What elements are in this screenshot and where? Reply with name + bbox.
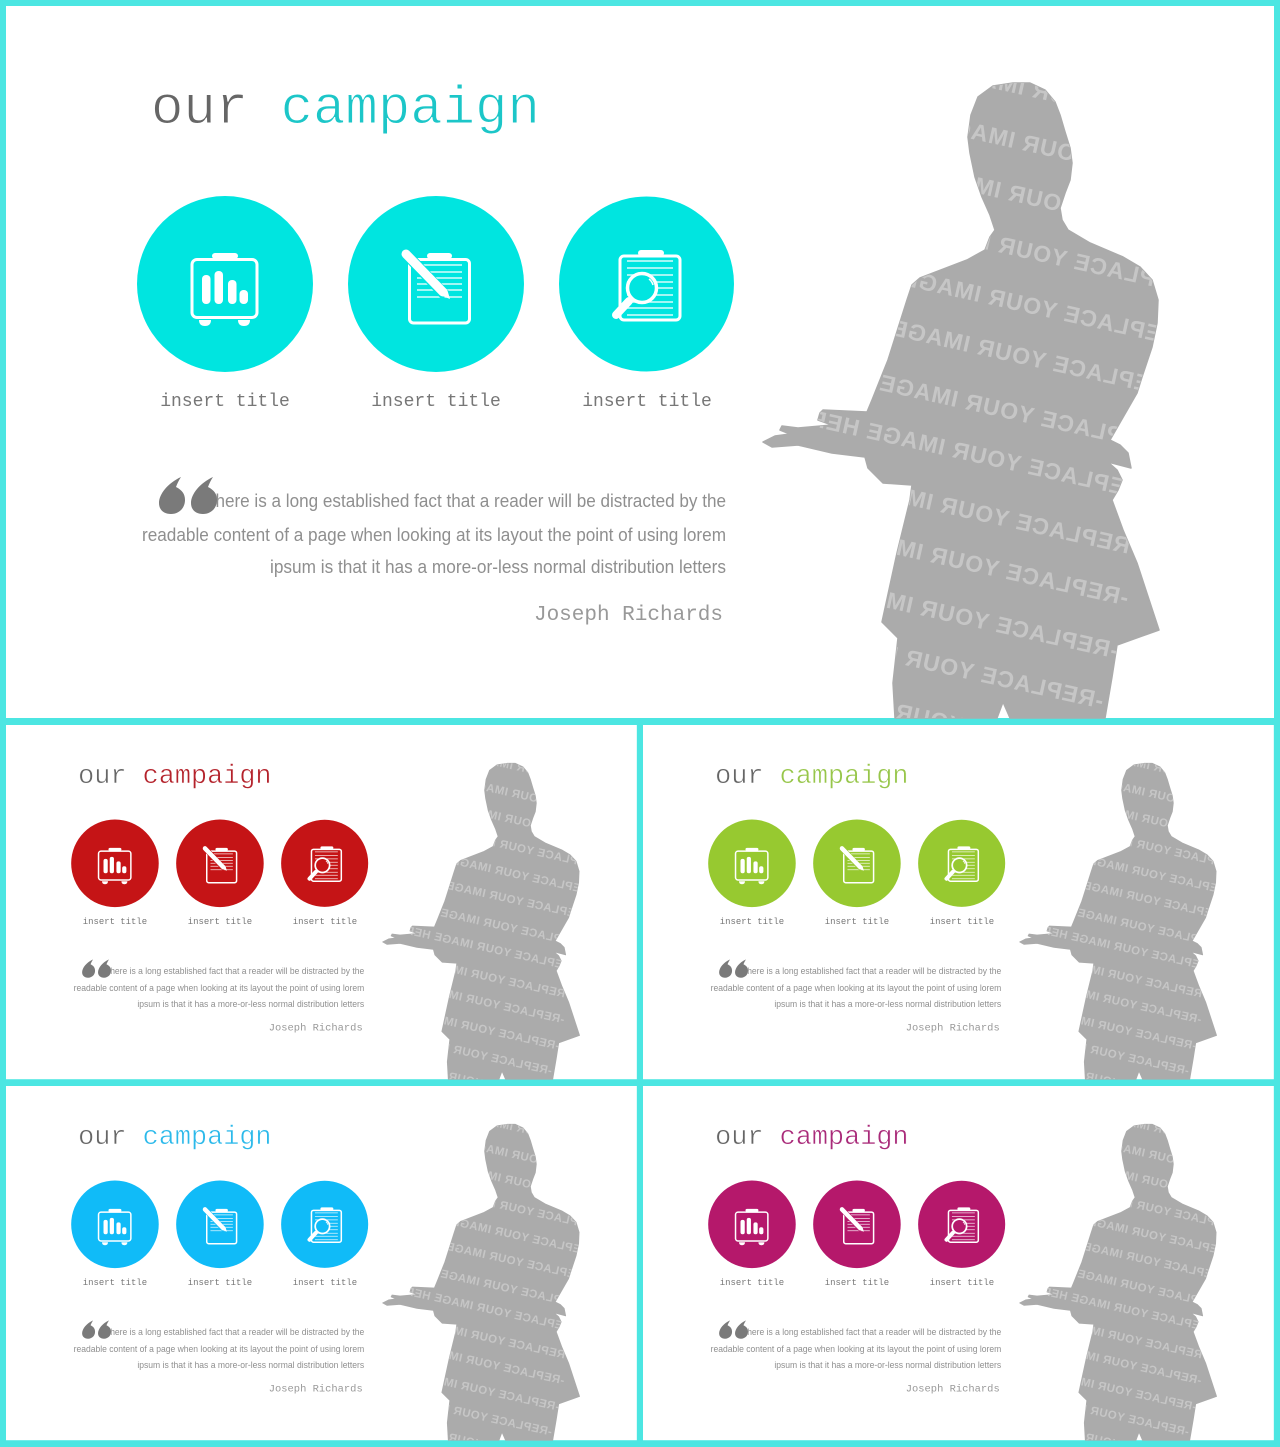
silhouette placeholder: -REPLACE YOUR IMAGE HERE: [373, 1026, 553, 1078]
silhouette placeholder: -REPLACE YOUR IMAGE HERE: [390, 1311, 570, 1362]
icon: quote marks: [719, 959, 748, 978]
silhouette placeholder: [1019, 1124, 1217, 1441]
quote text: There is a long established fact that a reader will be distracted by the: [742, 966, 1001, 976]
icon: presentation board: [137, 196, 313, 372]
silhouette placeholder: -REPLACE YOUR IMAGE HERE: [390, 950, 570, 1001]
label: insert title: [160, 392, 290, 412]
quote text: ipsum is that it has a more-or-less normal distribution letters: [270, 556, 726, 577]
author: Joseph Richards: [534, 604, 723, 627]
icon: presentation board: [708, 820, 796, 907]
label: insert title: [188, 1278, 252, 1288]
label: insert title: [720, 1278, 784, 1288]
silhouette placeholder: -REPLACE YOUR IMAGE HERE: [826, 248, 1189, 353]
icon: clipboard and pencil: [348, 196, 524, 372]
silhouette placeholder: -REPLACE YOUR IMAGE HERE: [1033, 923, 1213, 974]
silhouette placeholder: -REPLACE YOUR IMAGE HERE: [424, 795, 604, 846]
silhouette placeholder: -REPLACE YOUR IMAGE HERE: [1010, 1387, 1190, 1439]
silhouette placeholder: -REPLACE YOUR IMAGE HERE: [860, 94, 1223, 199]
silhouette placeholder: -REPLACE YOUR IMAGE HERE: [1045, 872, 1226, 923]
silhouette placeholder: -REPLACE YOUR IMAGE HERE: [1027, 950, 1207, 1001]
icon: quote marks: [82, 959, 111, 978]
icon: clipboard and magnifier: [281, 820, 368, 907]
label: insert title: [930, 1278, 994, 1288]
label: insert title: [371, 392, 501, 412]
silhouette placeholder: -REPLACE YOUR IMAGE HERE: [870, 41, 1233, 146]
icon: presentation board: [71, 820, 159, 907]
silhouette placeholder: -REPLACE YOUR IMAGE HERE: [414, 847, 594, 898]
label: insert title: [83, 917, 147, 927]
icon: clipboard and magnifier: [281, 1181, 368, 1268]
icon: quote marks: [719, 1320, 748, 1339]
silhouette placeholder: [1019, 762, 1217, 1080]
silhouette placeholder: -REPLACE YOUR IMAGE HERE: [431, 1131, 611, 1182]
silhouette placeholder: -REPLACE YOUR IMAGE HERE: [1068, 1131, 1248, 1182]
silhouette placeholder: -REPLACE YOUR IMAGE HERE: [396, 923, 576, 974]
silhouette placeholder: -REPLACE YOUR IMAGE HERE: [758, 559, 1121, 664]
silhouette placeholder: -REPLACE YOUR IMAGE HERE: [1005, 1053, 1185, 1104]
quote text: readable content of a page when looking at its layout the point of using lorem: [142, 524, 726, 545]
silhouette placeholder: -REPLACE YOUR IMAGE HERE: [1045, 1233, 1226, 1284]
silhouette placeholder: -REPLACE YOUR IMAGE HERE: [803, 353, 1166, 458]
silhouette placeholder: -REPLACE YOUR IMAGE HERE: [1051, 1208, 1231, 1259]
silhouette placeholder: -REPLACE YOUR IMAGE HERE: [396, 1284, 576, 1335]
silhouette placeholder: -REPLACE YOUR IMAGE HERE: [1010, 1026, 1190, 1078]
quote text: readable content of a page when looking at its layout the point of using lorem: [711, 1344, 1002, 1354]
quote text: There is a long established fact that a reader will be distracted by the: [105, 1327, 364, 1337]
label: insert title: [83, 1278, 147, 1288]
silhouette placeholder: -REPLACE YOUR IMAGE HERE: [846, 144, 1209, 249]
silhouette placeholder: -REPLACE YOUR IMAGE HERE: [768, 506, 1131, 611]
silhouette placeholder: -REPLACE YOUR IMAGE HERE: [403, 1260, 583, 1311]
panel: blue slide: [6, 1086, 637, 1447]
silhouette placeholder: -REPLACE YOUR IMAGE HERE: [380, 1002, 560, 1053]
silhouette placeholder: [382, 1124, 580, 1441]
silhouette placeholder: -REPLACE YOUR IMAGE HERE: [1017, 1363, 1197, 1414]
icon: clipboard and magnifier: [918, 820, 1005, 907]
silhouette placeholder: -REPLACE YOUR IMAGE HERE: [424, 1156, 604, 1207]
label: insert title: [930, 917, 994, 927]
silhouette placeholder: -REPLACE YOUR IMAGE HERE: [790, 401, 1153, 506]
silhouette placeholder: -REPLACE YOUR IMAGE HERE: [419, 1182, 599, 1233]
silhouette placeholder: -REPLACE YOUR IMAGE HERE: [403, 899, 583, 950]
icon: presentation board: [71, 1181, 159, 1268]
panel: red slide: [6, 725, 637, 1104]
quote text: readable content of a page when looking at its layout the point of using lorem: [711, 983, 1002, 993]
silhouette placeholder: -REPLACE YOUR IMAGE HERE: [436, 1105, 616, 1156]
label: insert title: [825, 917, 889, 927]
silhouette placeholder: -REPLACE YOUR IMAGE HERE: [368, 1053, 548, 1104]
quote text: ipsum is that it has a more-or-less normal distribution letters: [774, 999, 1002, 1009]
quote text: [74, 1327, 365, 1370]
title: our campaign: [78, 762, 272, 792]
silhouette placeholder: -REPLACE YOUR IMAGE HERE: [1027, 1311, 1207, 1362]
silhouette placeholder: -REPLACE YOUR IMAGE HERE: [385, 1336, 565, 1387]
silhouette placeholder: -REPLACE YOUR IMAGE HERE: [1061, 795, 1241, 846]
icon: clipboard and pencil: [176, 820, 264, 907]
quote text: ipsum is that it has a more-or-less normal distribution letters: [774, 1360, 1002, 1370]
quote text: [74, 966, 365, 1009]
silhouette placeholder: -REPLACE YOUR IMAGE HERE: [408, 1233, 589, 1284]
silhouette placeholder: -REPLACE YOUR IMAGE HERE: [431, 770, 611, 821]
silhouette placeholder: -REPLACE YOUR IMAGE HERE: [414, 1208, 594, 1259]
label: insert title: [582, 392, 712, 412]
silhouette placeholder: -REPLACE YOUR IMAGE HERE: [1068, 770, 1248, 821]
silhouette placeholder: -REPLACE YOUR IMAGE HERE: [1040, 899, 1220, 950]
silhouette placeholder: -REPLACE YOUR IMAGE HERE: [815, 298, 1178, 403]
author: Joseph Richards: [906, 1383, 1000, 1395]
silhouette placeholder: -REPLACE YOUR IMAGE HERE: [1073, 744, 1253, 795]
label: insert title: [293, 1278, 357, 1288]
silhouette placeholder: -REPLACE YOUR IMAGE HERE: [733, 663, 1096, 768]
panel: large turquoise slide: [6, 6, 1274, 768]
silhouette placeholder: -REPLACE YOUR IMAGE HERE: [1017, 1002, 1197, 1053]
silhouette placeholder: -REPLACE YOUR IMAGE HERE: [408, 872, 589, 923]
title: our campaign: [715, 1123, 909, 1153]
silhouette placeholder: -REPLACE YOUR IMAGE HERE: [1033, 1284, 1213, 1335]
quote text: readable content of a page when looking at its layout the point of using lorem: [74, 983, 365, 993]
author: Joseph Richards: [906, 1022, 1000, 1034]
author: Joseph Richards: [269, 1022, 363, 1034]
icon: clipboard and magnifier: [559, 196, 734, 372]
silhouette placeholder: -REPLACE YOUR IMAGE HERE: [1073, 1105, 1253, 1156]
icon: quote marks: [159, 477, 217, 514]
silhouette placeholder: -REPLACE YOUR IMAGE HERE: [743, 609, 1106, 714]
quote text: readable content of a page when looking at its layout the point of using lorem: [74, 1344, 365, 1354]
author: Joseph Richards: [269, 1383, 363, 1395]
silhouette placeholder: -REPLACE YOUR IMAGE HERE: [1040, 1260, 1220, 1311]
quote text: [711, 966, 1002, 1009]
quote text: ipsum is that it has a more-or-less normal distribution letters: [137, 1360, 365, 1370]
icon: clipboard and pencil: [813, 820, 901, 907]
icon: presentation board: [708, 1181, 796, 1268]
icon: clipboard and pencil: [813, 1181, 901, 1268]
silhouette placeholder: [762, 82, 1160, 719]
silhouette placeholder: -REPLACE YOUR IMAGE HERE: [1056, 821, 1236, 872]
icon: quote marks: [82, 1320, 111, 1339]
silhouette placeholder: [382, 762, 580, 1080]
panel: magenta slide: [643, 1086, 1274, 1447]
silhouette placeholder: -REPLACE YOUR IMAGE HERE: [373, 1387, 553, 1439]
silhouette placeholder: -REPLACE YOUR IMAGE HERE: [385, 975, 565, 1026]
title: our campaign: [715, 762, 909, 792]
panel: green slide: [643, 725, 1274, 1104]
silhouette placeholder: -REPLACE YOUR IMAGE HERE: [1061, 1156, 1241, 1207]
silhouette placeholder: -REPLACE YOUR IMAGE HERE: [1022, 975, 1202, 1026]
quote text: [142, 490, 726, 577]
quote text: ipsum is that it has a more-or-less normal distribution letters: [137, 999, 365, 1009]
title: our campaign: [78, 1123, 272, 1153]
icon: clipboard and magnifier: [918, 1181, 1005, 1268]
quote text: [711, 1327, 1002, 1370]
silhouette placeholder: -REPLACE YOUR IMAGE HERE: [836, 196, 1199, 301]
label: insert title: [188, 917, 252, 927]
silhouette placeholder: -REPLACE YOUR IMAGE HERE: [778, 456, 1141, 561]
label: insert title: [293, 917, 357, 927]
label: insert title: [825, 1278, 889, 1288]
icon: clipboard and pencil: [176, 1181, 264, 1268]
silhouette placeholder: -REPLACE YOUR IMAGE HERE: [419, 821, 599, 872]
label: insert title: [720, 917, 784, 927]
title: our campaign: [151, 79, 540, 140]
silhouette placeholder: -REPLACE YOUR IMAGE HERE: [380, 1363, 560, 1414]
silhouette placeholder: -REPLACE YOUR IMAGE HERE: [1056, 1182, 1236, 1233]
silhouette placeholder: -REPLACE YOUR IMAGE HERE: [1051, 847, 1231, 898]
quote text: There is a long established fact that a reader will be distracted by the: [205, 490, 726, 511]
quote text: There is a long established fact that a reader will be distracted by the: [105, 966, 364, 976]
quote text: There is a long established fact that a reader will be distracted by the: [742, 1327, 1001, 1337]
silhouette placeholder: -REPLACE YOUR IMAGE HERE: [1022, 1336, 1202, 1387]
silhouette placeholder: -REPLACE YOUR IMAGE HERE: [436, 744, 616, 795]
